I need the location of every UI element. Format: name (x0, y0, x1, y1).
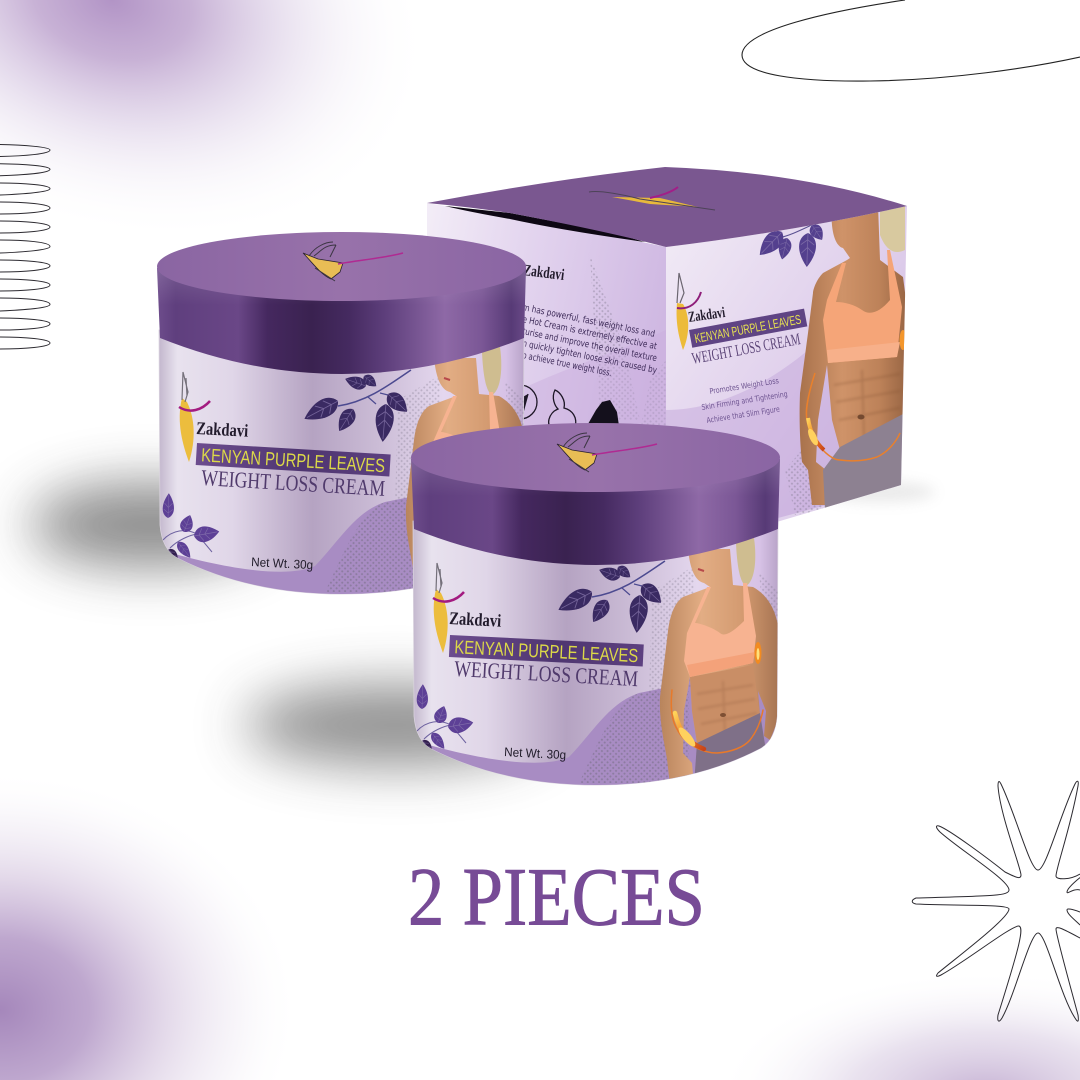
logo on lid (557, 433, 657, 472)
box benefit list: Skin Firming and Tightening (701, 389, 788, 412)
product box (157, 167, 907, 942)
icon: vegan badge (503, 385, 537, 419)
jar: front (411, 423, 784, 791)
box side brand name: Zakdavi (523, 262, 566, 284)
product subtitle: WEIGHT LOSS CREAM (454, 656, 639, 691)
box benefit list (701, 376, 788, 425)
box right face (427, 167, 907, 560)
leaf sprigs (416, 561, 666, 757)
logo on box (677, 273, 701, 350)
box side description text: m has powerful, fast weight loss and (521, 302, 656, 340)
box side description text: o achieve true weight loss. (521, 350, 613, 379)
jar lid (411, 423, 780, 565)
drop shadow: front jar (245, 685, 545, 765)
box benefit list: Promotes Weight Loss (709, 376, 779, 396)
box side description text: turise and improve the overall texture (521, 326, 658, 364)
label artwork (414, 538, 784, 791)
box side description text: e Hot Cream is extremely effective at (521, 314, 658, 352)
logo (433, 563, 464, 653)
decorative spring: left edge (0, 144, 50, 349)
product subtitle: WEIGHT LOSS CREAM (201, 465, 386, 501)
label artwork (160, 347, 530, 600)
icon: recycle (588, 400, 619, 426)
product band (196, 443, 391, 477)
decorative star: bottom right (912, 781, 1080, 1021)
icon: cruelty free rabbit (549, 390, 576, 428)
woman photo (660, 538, 779, 785)
product band (449, 635, 644, 667)
product band: KENYAN PURPLE LEAVES (201, 445, 386, 477)
box product band: KENYAN PURPLE LEAVES (693, 312, 802, 346)
jar body (413, 521, 778, 785)
drop shadow: box (825, 482, 935, 502)
box top lid (427, 167, 907, 247)
leaf sprigs (162, 370, 412, 566)
brand name: Zakdavi (196, 418, 249, 441)
woman photo (406, 347, 522, 568)
box product band (689, 309, 807, 348)
jar: back (157, 232, 530, 600)
box product subtitle: WEIGHT LOSS CREAM (690, 329, 802, 368)
jar lid (157, 232, 526, 374)
brand name: Zakdavi (449, 608, 502, 631)
box side description text: n quickly tighten loose skin caused by (521, 338, 658, 376)
net weight: Net Wt. 30g (504, 745, 567, 762)
drop shadow: back jar (30, 483, 270, 567)
product band: KENYAN PURPLE LEAVES (454, 637, 639, 667)
box left face (427, 203, 666, 426)
logo (179, 372, 210, 462)
heading: 2 pieces: 2 PIECES (408, 850, 705, 942)
box side description text (521, 302, 658, 379)
woman photo on box (800, 200, 906, 510)
jar body (159, 330, 524, 594)
box benefit list: Achieve that Slim Figure (706, 404, 781, 425)
logo on box lid (589, 187, 715, 210)
decorative loop: top right ellipse line (742, 0, 1080, 81)
leaves on box (760, 224, 823, 267)
net weight: Net Wt. 30g (251, 555, 314, 572)
logo on lid (303, 242, 403, 281)
box brand name: Zakdavi (687, 305, 726, 326)
